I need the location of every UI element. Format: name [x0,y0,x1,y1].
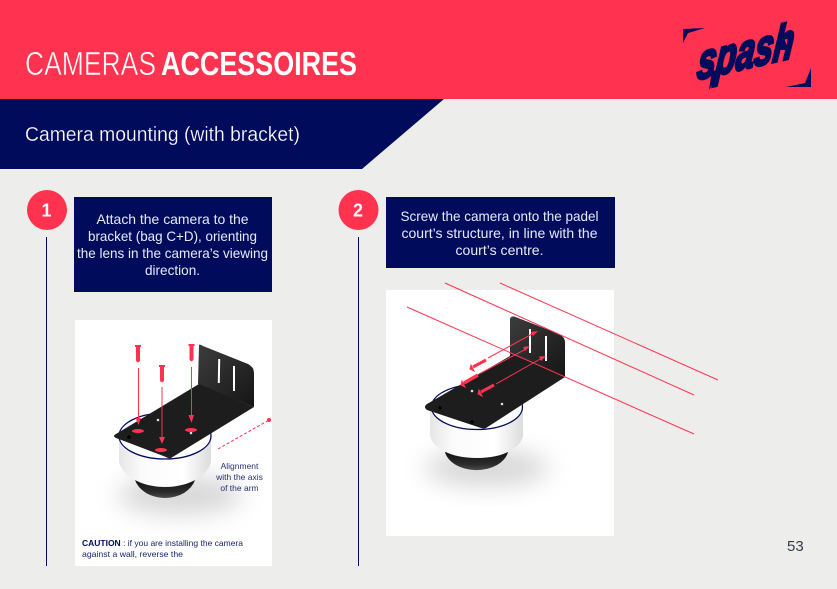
step 2 badge [338,190,378,230]
title: ACCESSOIRES [161,45,357,82]
step 2 photo panel [386,283,718,536]
bracket [114,345,254,458]
step 1 badge [27,190,67,230]
step 1 instruction box: direction. [145,262,200,278]
title: CAMERAS [25,45,156,82]
page number: 53 [787,538,804,555]
logo: spash: spash [695,13,798,92]
header banner [0,0,837,99]
camera dome [445,452,508,470]
camera body [119,435,211,487]
step 2 badge: 2 [353,200,363,220]
caution note [82,538,243,559]
alignment note [215,461,263,493]
bracket [425,316,565,428]
step 2 timeline line [358,237,359,566]
camera body [430,407,523,458]
camera shadow [118,475,242,515]
step 2 instruction box [386,197,615,268]
step 1 badge: 1 [41,200,52,220]
screws and arrows [461,331,546,396]
alignment dashed line [218,418,271,449]
step 2 instruction box: court’s structure, in line with the [402,225,598,241]
red alignment lines [407,283,718,434]
screws and arrows [132,344,197,452]
camera shadow [425,449,549,487]
step 1 instruction box: Attach the camera to the [96,211,249,227]
mounting ring [432,384,522,430]
alignment note: of the arm [220,483,259,493]
camera dome [135,480,195,498]
subtitle band [0,99,444,169]
step 1 timeline line [46,237,47,566]
step 2 instruction box: court’s centre. [456,242,544,258]
caution note: against a wall, reverse the [82,549,183,559]
mounting ring [119,413,211,459]
step 2 instruction box: Screw the camera onto the padel [400,208,598,224]
step 1 photo panel [75,320,272,566]
alignment note: Alignment [221,461,259,471]
caution note: CAUTION : if you are installing the camera [82,538,243,548]
alignment note: with the axis [215,472,263,482]
step 1 instruction box [74,197,272,292]
subtitle: Camera mounting (with bracket) [25,124,300,146]
step 1 instruction box: bracket (bag C+D), orienting [88,228,257,244]
step 1 instruction box: the lens in the camera’s viewing [77,245,268,261]
